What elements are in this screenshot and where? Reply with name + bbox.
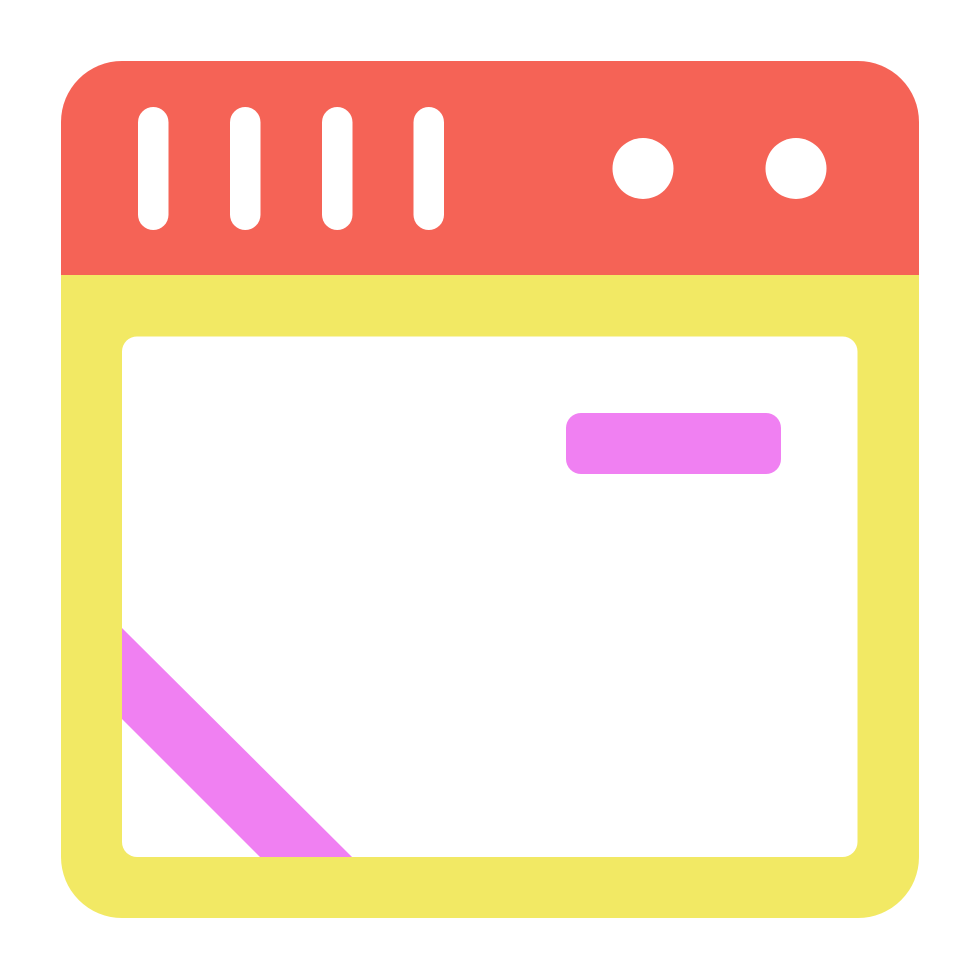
content area [122,336,858,857]
title bar vertical slots [138,107,444,230]
title bar [61,61,919,275]
window body [61,275,919,918]
pink diagonal stripe [122,628,352,857]
title bar round buttons [612,138,826,199]
pink label bar [566,413,781,474]
